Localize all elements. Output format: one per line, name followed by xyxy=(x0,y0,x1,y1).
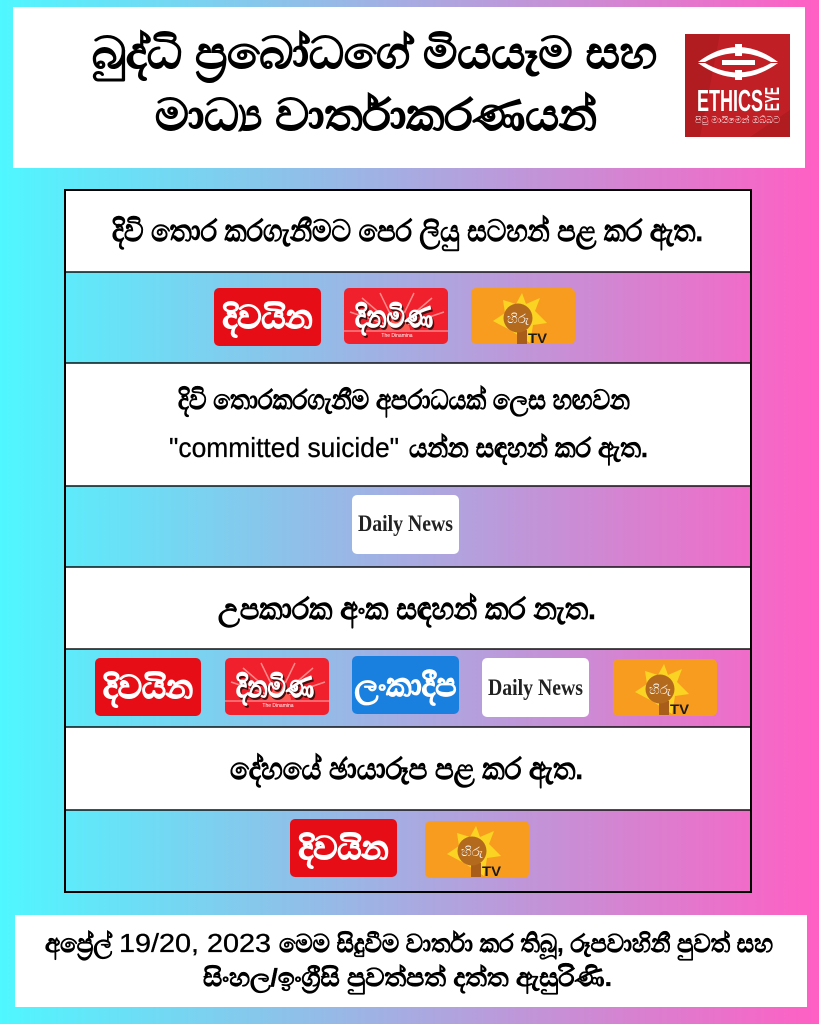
logo: Hiru TV, row 4: TV xyxy=(482,863,502,879)
logo: Dinamina, row 1: The Dinamina xyxy=(381,333,413,339)
logo: Hiru TV, row 4 xyxy=(425,821,529,879)
logo: Hiru TV, row 3: TV xyxy=(670,701,690,717)
row: helpline heading xyxy=(65,567,751,649)
panel: footer source note: 19/20, 2023 xyxy=(119,928,271,958)
logo: Divaina, row 1: දිවයින xyxy=(222,299,313,338)
logo: Hiru TV, row 4: හිරු xyxy=(461,844,483,859)
logo: Dinamina, row 3 xyxy=(225,658,329,715)
icon: Ethics Eye logo: පිටු මායිමෙන් ඔබ්බට xyxy=(695,115,781,125)
logo: Divaina, row 3: දිවයින xyxy=(103,669,193,708)
title: මාධ්‍ය වාර්තාකරණයන් xyxy=(155,91,597,140)
row: suicide note heading: දිවි තොර කරගැනීමට පෙර ලියු සටහන් පළ කර ඇත. xyxy=(112,215,703,252)
icon: Ethics Eye logo xyxy=(685,34,790,137)
logo: Dinamina, row 3: දිනමිණ xyxy=(238,673,316,708)
logo: Hiru TV, row 1 xyxy=(471,288,575,346)
row: body photographs heading: දේහයේ ඡායාරූප පළ කර ඇත. xyxy=(230,753,583,789)
panel: header xyxy=(13,7,805,168)
logo: Dinamina, row 1: දිනමිණ xyxy=(355,301,433,336)
row: decriminalising language heading: යන්න සඳහන් කර ඇත. xyxy=(409,433,648,466)
panel: footer source note: මෙම සිදුවීම වාර්තා කර තිබූ, රූපවාහිනී පුවත් සහ xyxy=(279,929,773,961)
logo: Dinamina, row 1 xyxy=(344,288,448,344)
logo: Hiru TV, row 1: TV xyxy=(528,330,548,346)
logo: Daily News, row 2 xyxy=(352,495,459,554)
logo: Daily News, row 3 xyxy=(482,658,589,717)
logo: Dinamina, row 3: දිනමිණ xyxy=(236,671,314,706)
icon: Ethics Eye logo: EYE xyxy=(762,87,784,111)
row: helpline heading: උපකාරක අංක සඳහන් කර නැත. xyxy=(218,593,596,629)
logo: Divaina, row 1 xyxy=(214,288,321,346)
logo: Hiru TV, row 1: හිරු xyxy=(507,311,529,326)
row: decriminalising language heading: දිවි තොරකරගැනීම අපරාධයක් ලෙස හඟවන xyxy=(178,385,630,418)
panel: footer source note xyxy=(15,915,807,1007)
panel: footer source note: සිංහල/ඉංග්‍රීසි පුවත්පත් දත්ත ඇසුරිණි. xyxy=(203,963,612,995)
logo: Daily News, row 2: Daily News xyxy=(358,511,453,536)
logo: Divaina, row 4 xyxy=(290,819,397,877)
logo: Lankadeepa, row 3: ලංකාදීප xyxy=(354,667,456,706)
logo: Daily News, row 3: Daily News xyxy=(488,675,583,700)
icon: Ethics Eye logo: ETHICS xyxy=(697,83,763,118)
row: decriminalising language heading xyxy=(65,363,751,486)
logo: Hiru TV, row 3 xyxy=(613,659,717,717)
title: බුද්ධි ප්‍රබෝධගේ මියයෑම සහ xyxy=(92,29,657,83)
logo: Dinamina, row 3: The Dinamina xyxy=(262,703,294,709)
panel: footer source note: අප්‍රේල් xyxy=(45,929,113,961)
row: suicide note heading xyxy=(65,190,751,272)
logo: Divaina, row 3 xyxy=(95,658,201,716)
row: decriminalising language heading: "committed suicide" xyxy=(169,432,399,463)
panel: reporting table xyxy=(65,190,751,892)
logo: Dinamina, row 1: දිනමිණ xyxy=(356,303,434,338)
logo: Divaina, row 4: දිවයින xyxy=(298,830,389,869)
row: body photographs heading xyxy=(65,727,751,810)
title xyxy=(92,29,657,140)
logo: Lankadeepa, row 3 xyxy=(352,656,459,714)
logo: Hiru TV, row 3: හිරු xyxy=(649,682,671,697)
